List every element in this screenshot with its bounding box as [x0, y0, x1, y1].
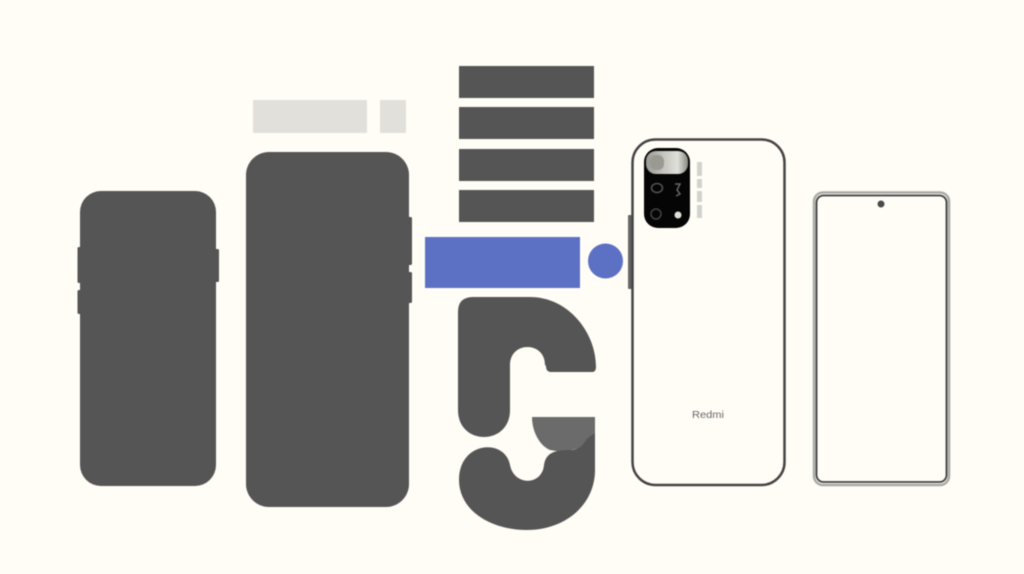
silhouette: small phone: [78, 191, 219, 486]
silhouette: large phone: [246, 152, 412, 507]
phone: rear view: [628, 140, 784, 485]
camera module: [644, 148, 690, 228]
placeholder bars above large phone: [253, 100, 406, 133]
blue rectangle: [425, 237, 580, 288]
brand text: Redmi: [692, 410, 724, 421]
phone: front view: [814, 192, 949, 485]
outer frame: [814, 192, 949, 485]
screen edge: [816, 196, 946, 482]
side button: [628, 215, 632, 289]
front camera: [878, 200, 884, 208]
stacked dark bars: [459, 66, 594, 222]
abstract S shape: [458, 297, 596, 530]
phone body outline: [632, 140, 784, 485]
blue circle: [588, 244, 623, 278]
vertical sensor label: [697, 162, 702, 218]
